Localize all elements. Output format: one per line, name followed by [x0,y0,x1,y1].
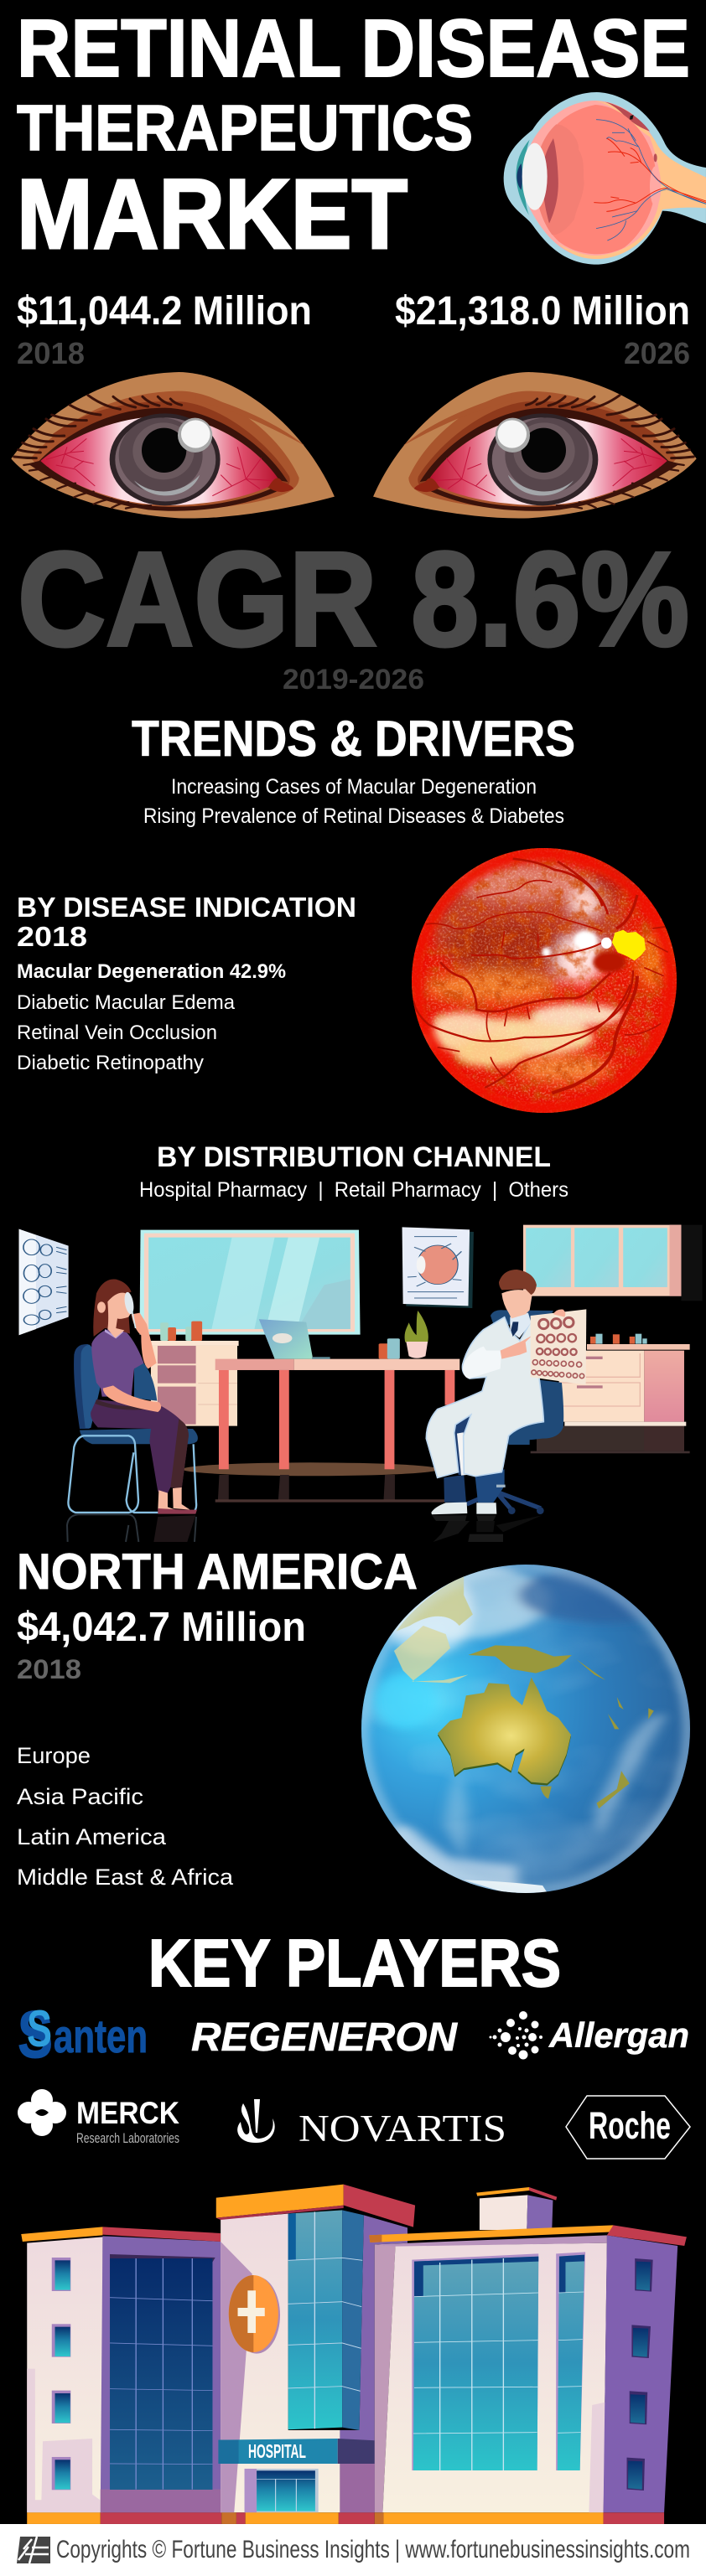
panel: key players [18,1926,690,2159]
panel: by disease indication [17,892,356,1074]
icon: eye anatomy cross-section [504,92,706,265]
patient floor reflection [67,1514,196,1542]
hospital entrance [245,2469,319,2512]
region: latin america: Latin America [17,1824,167,1849]
desk [215,1359,459,1469]
logo: Roche: Roche [589,2104,671,2147]
title: MARKET [17,159,408,270]
left drawer cabinet [151,1341,239,1426]
panel: CAGR [18,524,689,696]
2026 value: $21,318.0 Million [395,289,690,334]
logo: Roche [566,2096,690,2159]
region: middle east and africa: Middle East & Africa [17,1865,234,1890]
driver: macular degeneration: Increasing Cases of Macular Degeneration [171,775,537,799]
logo: Santen [18,1997,148,2072]
illustration: globe [351,1561,690,1894]
logo: Regeneron: REGENERON [191,2015,458,2060]
clinic room background [19,1225,703,1503]
retina fundus image [407,845,683,1117]
panel: by distribution channel [139,1141,568,1202]
2018 year label: 2018 [17,336,85,370]
logo: Santen: S [27,2000,52,2058]
footer [0,2524,706,2576]
hospital sign text: HOSPITAL [248,2440,306,2462]
segment: diabetic retinopathy: Diabetic Retinopathy [17,1052,204,1074]
panel: regions [17,1544,418,1890]
region: europe: Europe [17,1743,91,1768]
2026 year label: 2026 [624,336,690,370]
wall cabinet [523,1225,703,1301]
title [17,3,690,270]
2018 value: $11,044.2 Million [17,289,312,334]
hospital base strip [27,2512,664,2524]
panel: header [17,3,706,270]
illustration: hospital building [21,2185,687,2524]
distribution channels list: Hospital Pharmacy | Retail Pharmacy | Others [139,1178,568,1202]
north america value: $4,042.7 Million [17,1605,306,1650]
panel: market values [17,289,690,370]
logo: Merck Research Laboratories: MERCK [76,2096,179,2130]
wall mirror [139,1230,361,1335]
left wing [21,2227,221,2512]
right drawer cabinet [531,1344,690,1453]
segment: diabetic macular edema: Diabetic Macular Edema [17,991,236,1014]
logo: Allergan [490,2011,689,2060]
logo: Novartis: NOVARTIS [298,2108,506,2149]
illustration: eye clinic consultation [19,1225,703,1542]
heading: year: 2018 [17,921,87,952]
logo: Novartis [237,2099,506,2149]
logo: Merck Research Laboratories [18,2089,179,2146]
hospital sign band [218,2439,375,2464]
logo: Allergan: Allergan [548,2015,689,2055]
leading segment: Macular Degeneration 42.9% [17,960,286,983]
icon: right red eye [373,372,697,518]
icon: Fortune Business Insights logo [17,2537,50,2563]
segment: retinal vein occlusion: Retinal Vein Occlusion [17,1022,217,1044]
logo: Merck Research Laboratories: Research Laboratories [76,2130,179,2146]
floor shadow and desk reflection [182,1462,449,1503]
heading: trends and drivers: TRENDS & DRIVERS [132,711,575,767]
hospital chimney [476,2187,557,2230]
north america year: 2018 [17,1654,81,1684]
panel: trends and drivers [132,711,575,828]
logo: Santen: anten [54,2010,148,2062]
heading: key players: KEY PLAYERS [148,1926,561,2000]
icon: left red eye [11,372,335,518]
laptop [259,1319,330,1359]
bottles [160,1322,647,1359]
eye doctor [426,1270,586,1514]
potted plant [405,1311,428,1358]
patient [68,1280,198,1514]
heading: by disease indication: BY DISEASE INDICATION [17,892,356,923]
heading: by distribution channel: BY DISTRIBUTION CHANNEL [157,1141,551,1173]
medical cross medallion [229,2275,280,2354]
glasses poster [19,1229,69,1335]
heading: north america: NORTH AMERICA [17,1544,418,1600]
doctor floor reflection [432,1515,542,1542]
CAGR period: 2019-2026 [283,664,424,696]
region: asia pacific: Asia Pacific [17,1784,143,1809]
driver: retinal diseases and diabetes: Rising Prevalence of Retinal Diseases & Diabetes [143,804,564,828]
title: THERAPEUTICS [17,92,473,164]
central tower [216,2185,415,2512]
eye chart poster [402,1227,474,1308]
right wing [369,2225,687,2512]
logo: Santen: S [18,1997,53,2072]
